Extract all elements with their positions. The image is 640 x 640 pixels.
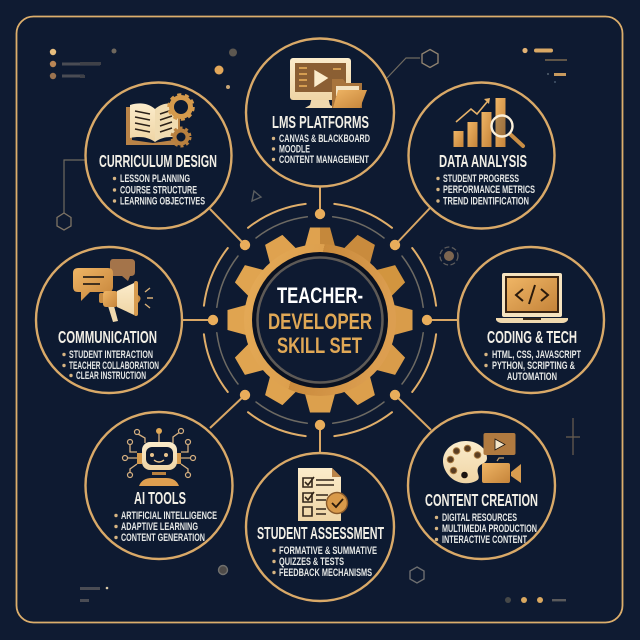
bullet list: PERFORMANCE METRICS [443,184,535,196]
heading: CURRICULUM DESIGN [99,151,217,171]
bullet list: CONTENT GENERATION [121,532,205,544]
heading: COMMUNICATION [58,327,157,347]
bullet list [436,173,535,208]
bullet list: PYTHON, SCRIPTING & [492,360,575,372]
panel: data analysis [408,82,554,228]
icon: checklist document [298,468,348,521]
connector arcs around gear [204,204,436,436]
panel: student assessment [246,453,394,601]
bullet list: ARTIFICIAL INTELLIGENCE [121,510,217,522]
icon: robot with circuits [122,428,196,486]
center title [268,283,372,358]
bullet list: ADAPTIVE LEARNING [121,521,198,533]
icon: book and gears [126,95,193,146]
heading: AI TOOLS [134,488,186,508]
bullet list: DIGITAL RESOURCES [442,512,517,524]
bullet list: MOODLE [279,144,310,156]
bullet list: TEACHER COLLABORATION [69,360,159,372]
heading: CODING & TECH [487,327,577,347]
bullet list: FEEDBACK MECHANISMS [279,567,372,579]
panel: communication [36,247,182,393]
heading: DATA ANALYSIS [439,151,527,171]
connector lines and nodes [182,186,458,452]
bullet list [272,545,377,579]
bullet list: FORMATIVE & SUMMATIVE [279,545,377,557]
bullet list [62,349,159,382]
bullet list: INTERACTIVE CONTENT [442,534,527,546]
central gear [228,228,412,412]
center title: SKILL SET [277,333,362,358]
bullet list: AUTOMATION [507,371,557,383]
bullet list [114,510,217,544]
bullet list: LEARNING OBJECTIVES [120,196,205,208]
center title: DEVELOPER [268,309,372,334]
bullet list: HTML, CSS, JAVASCRIPT [492,349,581,361]
icon: laptop with code [496,273,568,323]
bullet list: STUDENT INTERACTION [69,349,153,361]
bullet list [113,173,205,208]
panel: content creation [408,412,555,559]
center title: TEACHER- [277,283,363,308]
icon: palette, video and camera [443,433,521,483]
icon: speech bubbles and megaphone [73,259,153,322]
heading: CONTENT CREATION [425,490,538,510]
heading: LMS PLATFORMS [272,112,369,132]
decorative background marks [50,48,580,603]
icon: monitor and folder [290,58,367,108]
panel: coding and tech [458,247,604,393]
bullet list: CLEAR INSTRUCTION [76,370,146,382]
bullet list: QUIZZES & TESTS [279,556,344,568]
bullet list [435,512,537,546]
bullet list: STUDENT PROGRESS [443,173,519,185]
bullet list: MULTIMEDIA PRODUCTION [442,523,537,535]
bullet list: COURSE STRUCTURE [120,184,197,196]
panel: LMS platforms [246,38,394,186]
heading: STUDENT ASSESSMENT [257,523,384,543]
bullet list: TREND IDENTIFICATION [443,196,529,208]
bullet list [272,133,370,166]
icon: bar chart with magnifier [454,98,523,147]
bullet list: CANVAS & BLACKBOARD [279,133,370,145]
bullet list: LESSON PLANNING [120,173,190,185]
panel: AI tools [86,412,232,559]
bullet list [484,349,581,383]
panel: curriculum design [86,82,232,228]
bullet list: CONTENT MANAGEMENT [279,154,369,166]
